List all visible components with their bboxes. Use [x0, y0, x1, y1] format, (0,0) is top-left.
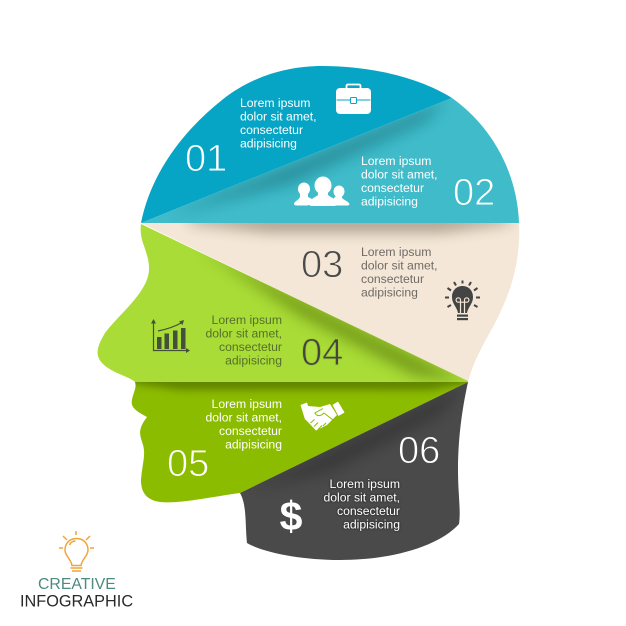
segment 04 background — [98, 224, 468, 382]
segment 01 background — [141, 66, 452, 223]
logo text: infographic: INFOGRAPHIC — [20, 592, 133, 610]
icon: bar chart — [151, 319, 190, 353]
segment 06 background — [240, 382, 468, 560]
number 03: 03 — [301, 244, 343, 286]
text block 03: Lorem ipsum — [361, 245, 431, 259]
text block 01: dolor sit amet, — [240, 110, 317, 124]
text block 02: Lorem ipsum — [361, 154, 431, 168]
number 06: 06 — [398, 430, 440, 472]
text block 06: adipisicing — [343, 518, 400, 532]
text block 01: adipisicing — [240, 136, 297, 150]
icon: handshake — [300, 402, 344, 430]
number 05: 05 — [167, 443, 209, 485]
text block 04: adipisicing — [225, 354, 282, 368]
text block 05: dolor sit amet, — [205, 410, 282, 424]
text block 03: consectetur — [361, 272, 424, 286]
text block 02: adipisicing — [361, 194, 418, 208]
head infographic — [98, 66, 519, 560]
text block 06: consectetur — [337, 504, 400, 518]
segment 02 background — [141, 98, 519, 223]
text block 01: consectetur — [240, 123, 303, 137]
text block 04: dolor sit amet, — [205, 326, 282, 340]
text block 06: dolor sit amet, — [323, 490, 400, 504]
text block 02: consectetur — [361, 181, 424, 195]
text block 04: Lorem ipsum — [212, 313, 282, 327]
text block 02: dolor sit amet, — [361, 168, 438, 182]
icon: light bulb — [445, 280, 480, 320]
text block 05: Lorem ipsum — [212, 397, 282, 411]
segment 03 background — [141, 216, 519, 382]
icon: briefcase — [336, 84, 371, 114]
logo: creative infographic — [20, 531, 133, 610]
icon: dollar sign: $ — [280, 493, 303, 539]
icon: logo light bulb — [59, 531, 94, 571]
text block 01: Lorem ipsum — [240, 96, 310, 110]
number 02: 02 — [453, 172, 495, 214]
text block 03: adipisicing — [361, 286, 418, 300]
number 04: 04 — [301, 332, 343, 374]
logo text: creative: CREATIVE — [38, 576, 116, 593]
text block 06: Lorem ipsum — [330, 477, 400, 491]
number 01: 01 — [185, 138, 227, 180]
text block 04: consectetur — [219, 340, 282, 354]
icon: people — [294, 176, 349, 206]
text block 03: dolor sit amet, — [361, 258, 438, 272]
segment 05 background — [130, 374, 470, 502]
text block 05: consectetur — [219, 424, 282, 438]
text block 05: adipisicing — [225, 438, 282, 452]
